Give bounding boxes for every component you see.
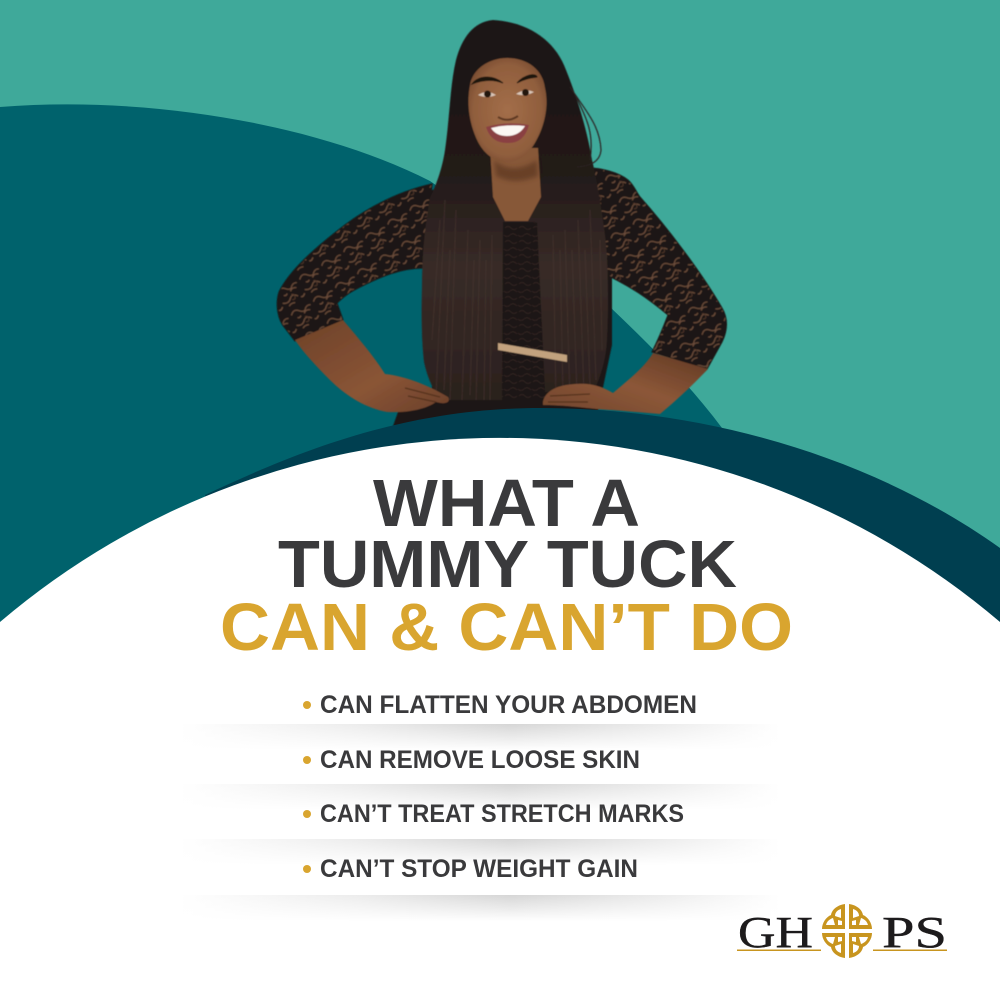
knot top right [849, 904, 872, 929]
list item 1: CAN FLATTEN YOUR ABDOMEN [320, 691, 697, 719]
hair [422, 20, 608, 400]
logo underline right [873, 950, 947, 951]
left forearm and hand [295, 320, 449, 412]
list [180, 691, 780, 921]
title line 3: CAN & CAN’T DO [220, 590, 793, 665]
belt [498, 343, 567, 362]
list item 2: CAN REMOVE LOOSE SKIN [320, 746, 640, 774]
eyebrows [472, 75, 537, 84]
list item 4 [180, 855, 780, 921]
hair texture strands [432, 200, 602, 405]
neck shadow [494, 160, 538, 181]
title [220, 466, 793, 665]
white curved panel [0, 438, 1000, 1000]
title line 2: TUMMY TUCK [278, 527, 737, 602]
list item 4: CAN’T STOP WEIGHT GAIN [320, 855, 638, 883]
woman portrait illustration [277, 20, 726, 426]
knot bottom right [849, 933, 872, 958]
teeth [491, 125, 525, 136]
list item 3: CAN’T TREAT STRETCH MARKS [320, 800, 684, 828]
dress centre lace [502, 222, 545, 400]
loose hair strands [570, 87, 601, 167]
logo underline left [737, 950, 821, 951]
navy curved band [205, 408, 1000, 640]
neck and chest [490, 148, 541, 221]
right lace sleeve [590, 168, 726, 369]
list item 3 [180, 800, 780, 865]
knot bottom left [822, 933, 845, 958]
face [468, 58, 547, 162]
left lace sleeve [277, 184, 432, 341]
lips [486, 123, 529, 143]
logo [737, 904, 947, 958]
right forearm and hand [543, 353, 708, 414]
knot top left [822, 904, 845, 929]
list item 1 [180, 691, 780, 750]
dress torso [393, 178, 612, 426]
logo text PS: PS [882, 908, 947, 957]
list item 2 [180, 746, 780, 810]
title line 1: WHAT A [373, 466, 640, 541]
eyes [478, 90, 534, 97]
icon: celtic knot cross [822, 904, 872, 958]
right hand finger lines [548, 394, 590, 402]
left hand finger lines [405, 388, 440, 402]
dark teal curved shape [0, 104, 722, 640]
nose [498, 116, 518, 120]
logo text GH: GH [738, 908, 813, 957]
irises [484, 89, 529, 98]
